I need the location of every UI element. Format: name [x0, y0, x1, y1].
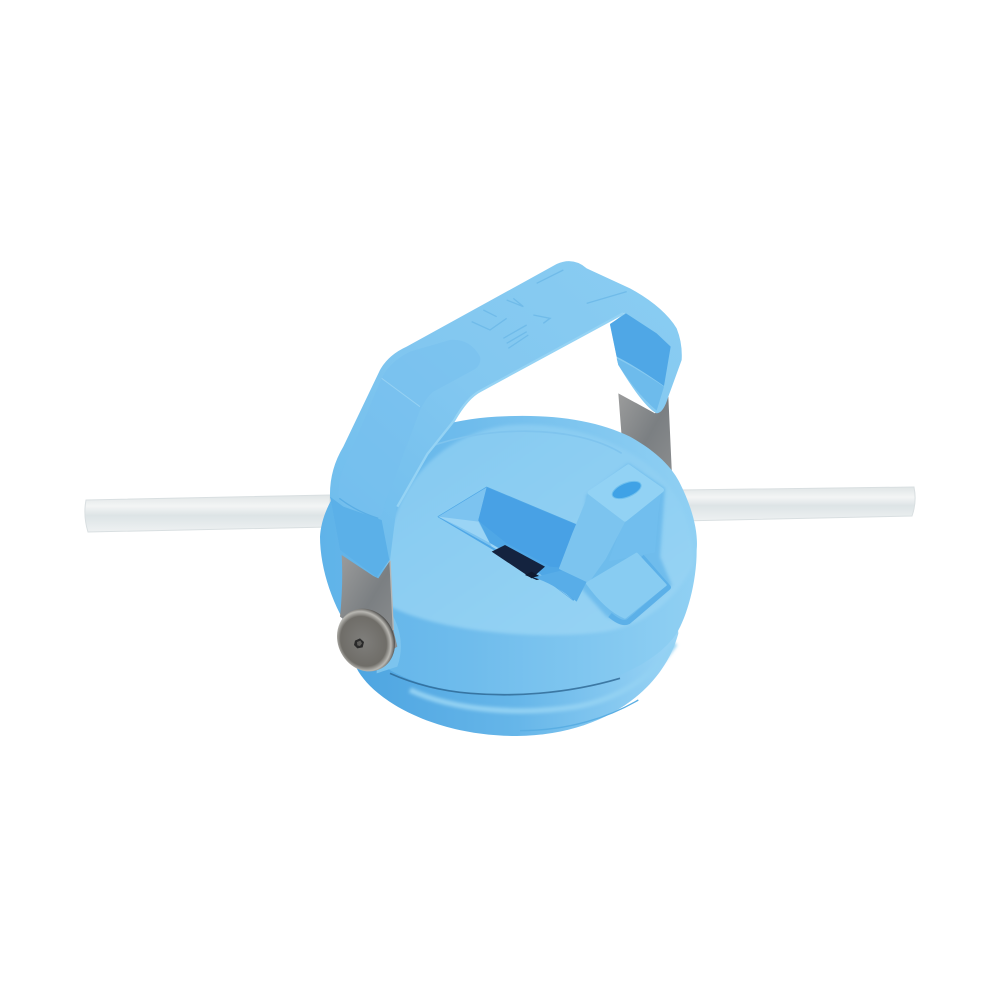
handle inner face	[610, 313, 671, 386]
sip opening recess	[438, 487, 577, 601]
right steel strap	[618, 393, 673, 490]
nozzle hole	[610, 478, 644, 502]
left grip panel	[338, 340, 480, 518]
spout top face	[590, 467, 662, 519]
tab edge	[610, 557, 668, 622]
hex screw	[326, 598, 406, 682]
spout right face	[610, 493, 660, 560]
right straw segment	[680, 487, 915, 521]
soft shadow around spout	[577, 463, 672, 623]
tab	[587, 554, 665, 617]
carry handle	[330, 261, 682, 577]
threaded base ring	[357, 613, 678, 736]
embossed logo marks	[472, 270, 627, 348]
lid body	[320, 416, 697, 695]
flip spout with nozzle and tab	[533, 463, 672, 623]
blue bump behind screw	[377, 613, 401, 673]
shadow gap under lid	[390, 673, 620, 695]
spout front face	[560, 493, 625, 582]
inner edge highlight	[397, 313, 623, 507]
lid top surface	[386, 424, 694, 635]
left straw segment	[85, 495, 330, 532]
left steel strap	[340, 555, 397, 653]
